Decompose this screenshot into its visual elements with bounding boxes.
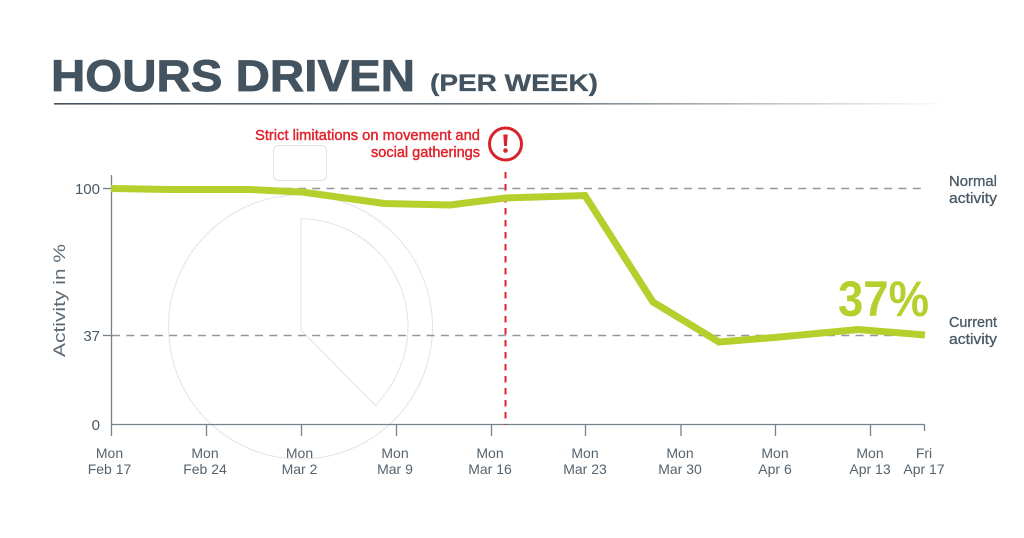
y-axis title: Activity in %	[51, 244, 69, 357]
restriction callout: Strict limitations on movement and	[255, 127, 480, 144]
x-axis labels	[88, 445, 945, 477]
reference lines	[112, 188, 926, 336]
title: (PER WEEK)	[430, 70, 598, 97]
x-axis labels: Apr 13	[849, 461, 891, 477]
y-axis labels: 100	[75, 181, 100, 198]
label: current activity: Current	[949, 315, 997, 331]
title	[51, 52, 598, 101]
y-axis labels: 37	[83, 328, 100, 345]
restriction callout: social gatherings	[371, 144, 480, 161]
restriction callout	[255, 127, 522, 161]
x-axis labels: Mar 30	[658, 461, 702, 477]
x-axis labels: Mar 9	[377, 461, 413, 477]
x-axis labels: Mon	[96, 445, 123, 461]
label: current activity: activity	[949, 332, 998, 348]
label: normal activity: activity	[949, 191, 998, 207]
y-axis labels: 0	[92, 417, 100, 434]
value callout: 37%: 37%	[838, 271, 929, 327]
x-axis labels: Feb 24	[183, 461, 227, 477]
x-axis labels: Feb 17	[88, 461, 132, 477]
x-axis labels: Mon	[666, 445, 694, 461]
title: HOURS DRIVEN	[51, 52, 415, 101]
label: normal activity: Normal	[949, 174, 997, 190]
restriction marker line	[504, 172, 506, 425]
x-axis labels: Mon	[381, 445, 409, 461]
faint placeholder shapes	[168, 146, 432, 459]
y-axis labels	[75, 181, 100, 434]
x-axis labels: Mon	[761, 445, 789, 461]
x-axis labels: Mon	[476, 445, 504, 461]
label: current activity	[949, 315, 998, 348]
x-axis labels: Mon	[191, 445, 219, 461]
x-axis labels: Mar 23	[563, 461, 607, 477]
x-axis labels: Mon	[856, 445, 884, 461]
icon: exclamation	[490, 128, 522, 160]
x-axis labels: Mar 16	[468, 461, 512, 477]
x-axis labels: Fri	[916, 445, 932, 461]
x-axis labels: Mon	[571, 445, 599, 461]
x-axis labels: Mon	[286, 445, 313, 461]
x-axis labels: Mar 2	[282, 461, 318, 477]
activity line	[111, 188, 925, 342]
x-axis labels: Apr 6	[758, 461, 792, 477]
chart axes	[103, 175, 924, 436]
label: normal activity	[949, 174, 998, 207]
x-axis labels: Apr 17	[903, 461, 945, 477]
